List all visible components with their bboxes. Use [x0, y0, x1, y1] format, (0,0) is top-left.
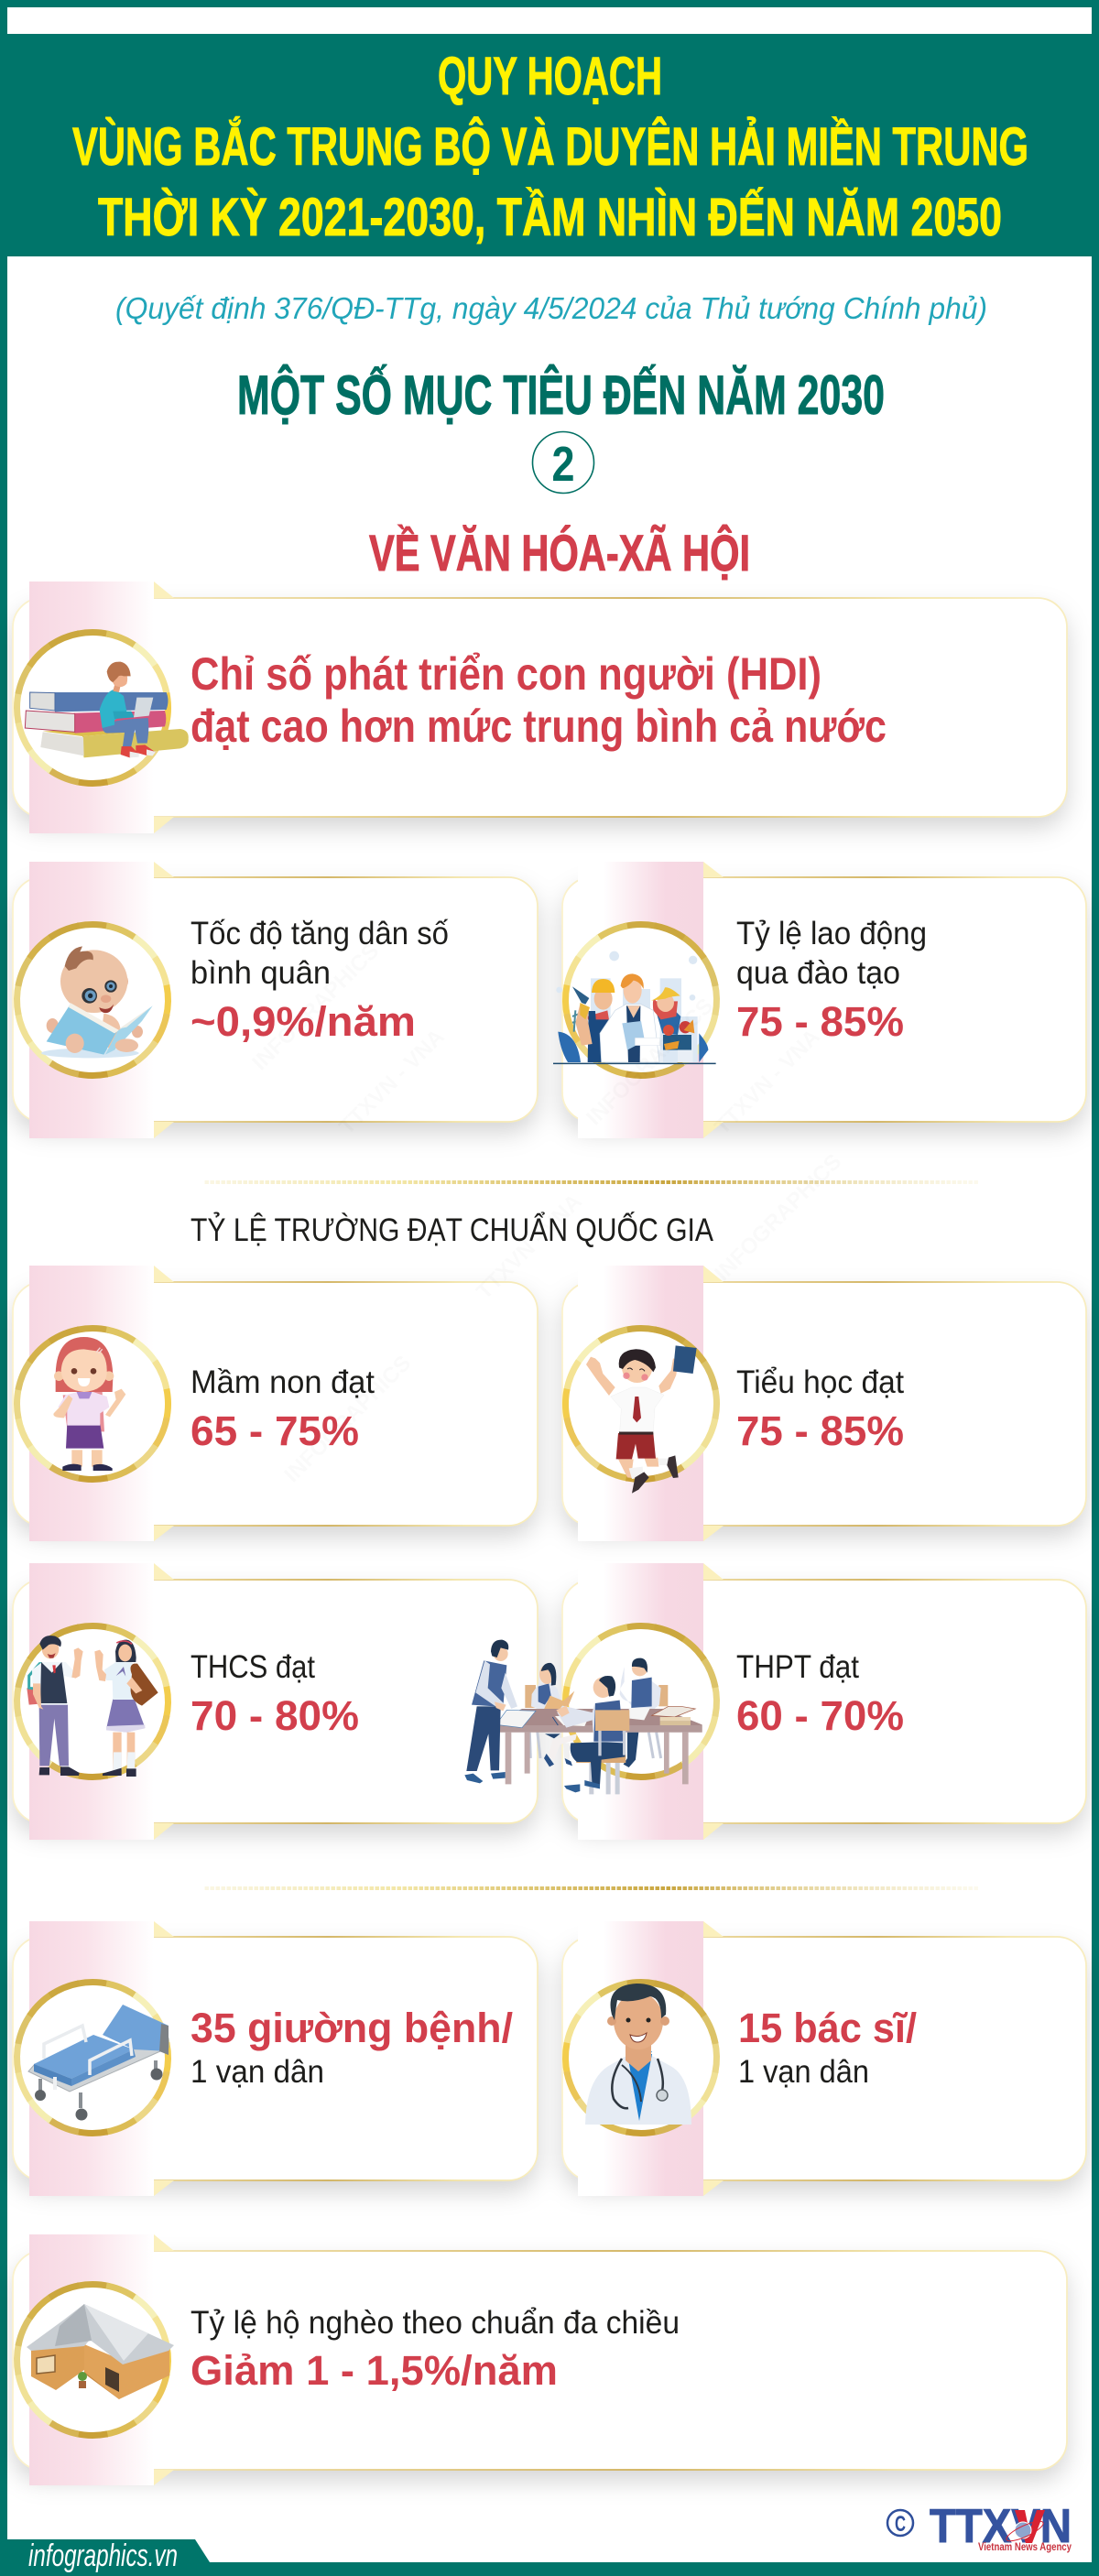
lower secondary text: 70 - 80% — [190, 1692, 359, 1739]
logo: TTXVN: Vietnam News Agency — [978, 2542, 1072, 2553]
infographic canvas: INFOGRAPHICS — [710, 1149, 846, 1286]
lower secondary text — [190, 1649, 359, 1739]
beds text: 35 giường bệnh/ — [190, 2005, 513, 2051]
panel: HDI — [0, 582, 1067, 833]
infographic canvas: TTXVN - VNA — [334, 1025, 450, 1139]
primary text — [736, 1364, 904, 1454]
labour text: 75 - 85% — [736, 998, 904, 1045]
population text — [190, 916, 449, 1045]
icon: students around table — [464, 1640, 702, 1794]
icon: workers — [553, 951, 716, 1063]
beds text — [190, 2005, 513, 2090]
poverty text — [190, 2305, 680, 2394]
category heading: VỀ VĂN HÓA-XÃ HỘI — [369, 524, 750, 582]
poverty text: Giảm 1 - 1,5%/năm — [190, 2347, 558, 2394]
infographic canvas: INFOGRAPHICS — [582, 994, 718, 1130]
title — [72, 47, 1028, 247]
infographic canvas: TTXVN - VNA — [472, 1190, 587, 1304]
preschool text — [190, 1364, 375, 1454]
icon: two students — [27, 1636, 158, 1777]
panel: hospital beds — [0, 1921, 538, 2196]
icon: boy on books — [25, 662, 189, 757]
icon: house — [27, 2304, 174, 2399]
panel: poverty rate — [0, 2234, 1067, 2485]
panel: population growth — [0, 862, 538, 1138]
infographic canvas: INFOGRAPHICS — [279, 1351, 416, 1487]
title: QUY HOẠCH — [438, 47, 662, 106]
upper secondary text: THPT đạt — [736, 1649, 859, 1685]
beds text: 1 vạn dân — [190, 2054, 324, 2090]
header banner — [0, 34, 1099, 256]
upper secondary text: 60 - 70% — [736, 1692, 904, 1739]
icon: preschool girl — [53, 1337, 125, 1471]
HDI text — [190, 648, 887, 752]
icon: baby reading — [41, 946, 153, 1058]
panel: lower secondary — [0, 1563, 538, 1840]
icon: hospital bed — [28, 2005, 169, 2121]
HDI text: đạt cao hơn mức trung bình cả nước — [190, 701, 887, 752]
infographic canvas: TTXVN - VNA — [710, 1025, 825, 1139]
infographic canvas: INFOGRAPHICS — [247, 939, 384, 1075]
primary text: Tiểu học đạt — [736, 1364, 904, 1400]
population text: bình quân — [190, 955, 331, 991]
heading: school standard rate: TỶ LỆ TRƯỜNG ĐẠT CHUẨN QUỐC GIA — [190, 1212, 714, 1248]
number badge: 2 — [551, 437, 575, 492]
doctors text: 15 bác sĩ/ — [738, 2005, 917, 2051]
logo: TTXVN: C — [895, 2512, 906, 2537]
labour text: qua đào tạo — [736, 955, 900, 991]
upper secondary text — [736, 1649, 904, 1739]
preschool text: Mầm non đạt — [190, 1364, 375, 1400]
doctors text — [738, 2005, 917, 2090]
doctors text: 1 vạn dân — [738, 2054, 869, 2090]
lower secondary text: THCS đạt — [190, 1649, 315, 1685]
panel: primary school — [536, 1266, 1086, 1541]
panel: doctors — [536, 1921, 1086, 2196]
logo: TTXVN: TTXVN — [930, 2500, 1072, 2553]
panel: preschool — [0, 1266, 538, 1541]
HDI text: Chỉ số phát triển con người (HDI) — [190, 648, 822, 700]
panel: trained labour — [536, 862, 1086, 1138]
subtitle: (Quyết định 376/QĐ-TTg, ngày 4/5/2024 của Thủ tướng Chính phủ) — [115, 291, 987, 325]
labour text: Tỷ lệ lao động — [736, 916, 927, 951]
panel: upper secondary — [536, 1563, 1086, 1840]
population text: ~0,9%/năm — [190, 998, 416, 1045]
primary text: 75 - 85% — [736, 1408, 904, 1454]
icon: jumping boy — [586, 1345, 697, 1494]
number badge — [533, 432, 593, 493]
preschool text: 65 - 75% — [190, 1408, 359, 1454]
footer tab: infographics.vn — [28, 2538, 178, 2573]
icon: doctor — [585, 1984, 691, 2125]
poverty text: Tỷ lệ hộ nghèo theo chuẩn đa chiều — [190, 2305, 680, 2341]
labour text — [736, 916, 927, 1045]
population text: Tốc độ tăng dân số — [190, 916, 449, 951]
